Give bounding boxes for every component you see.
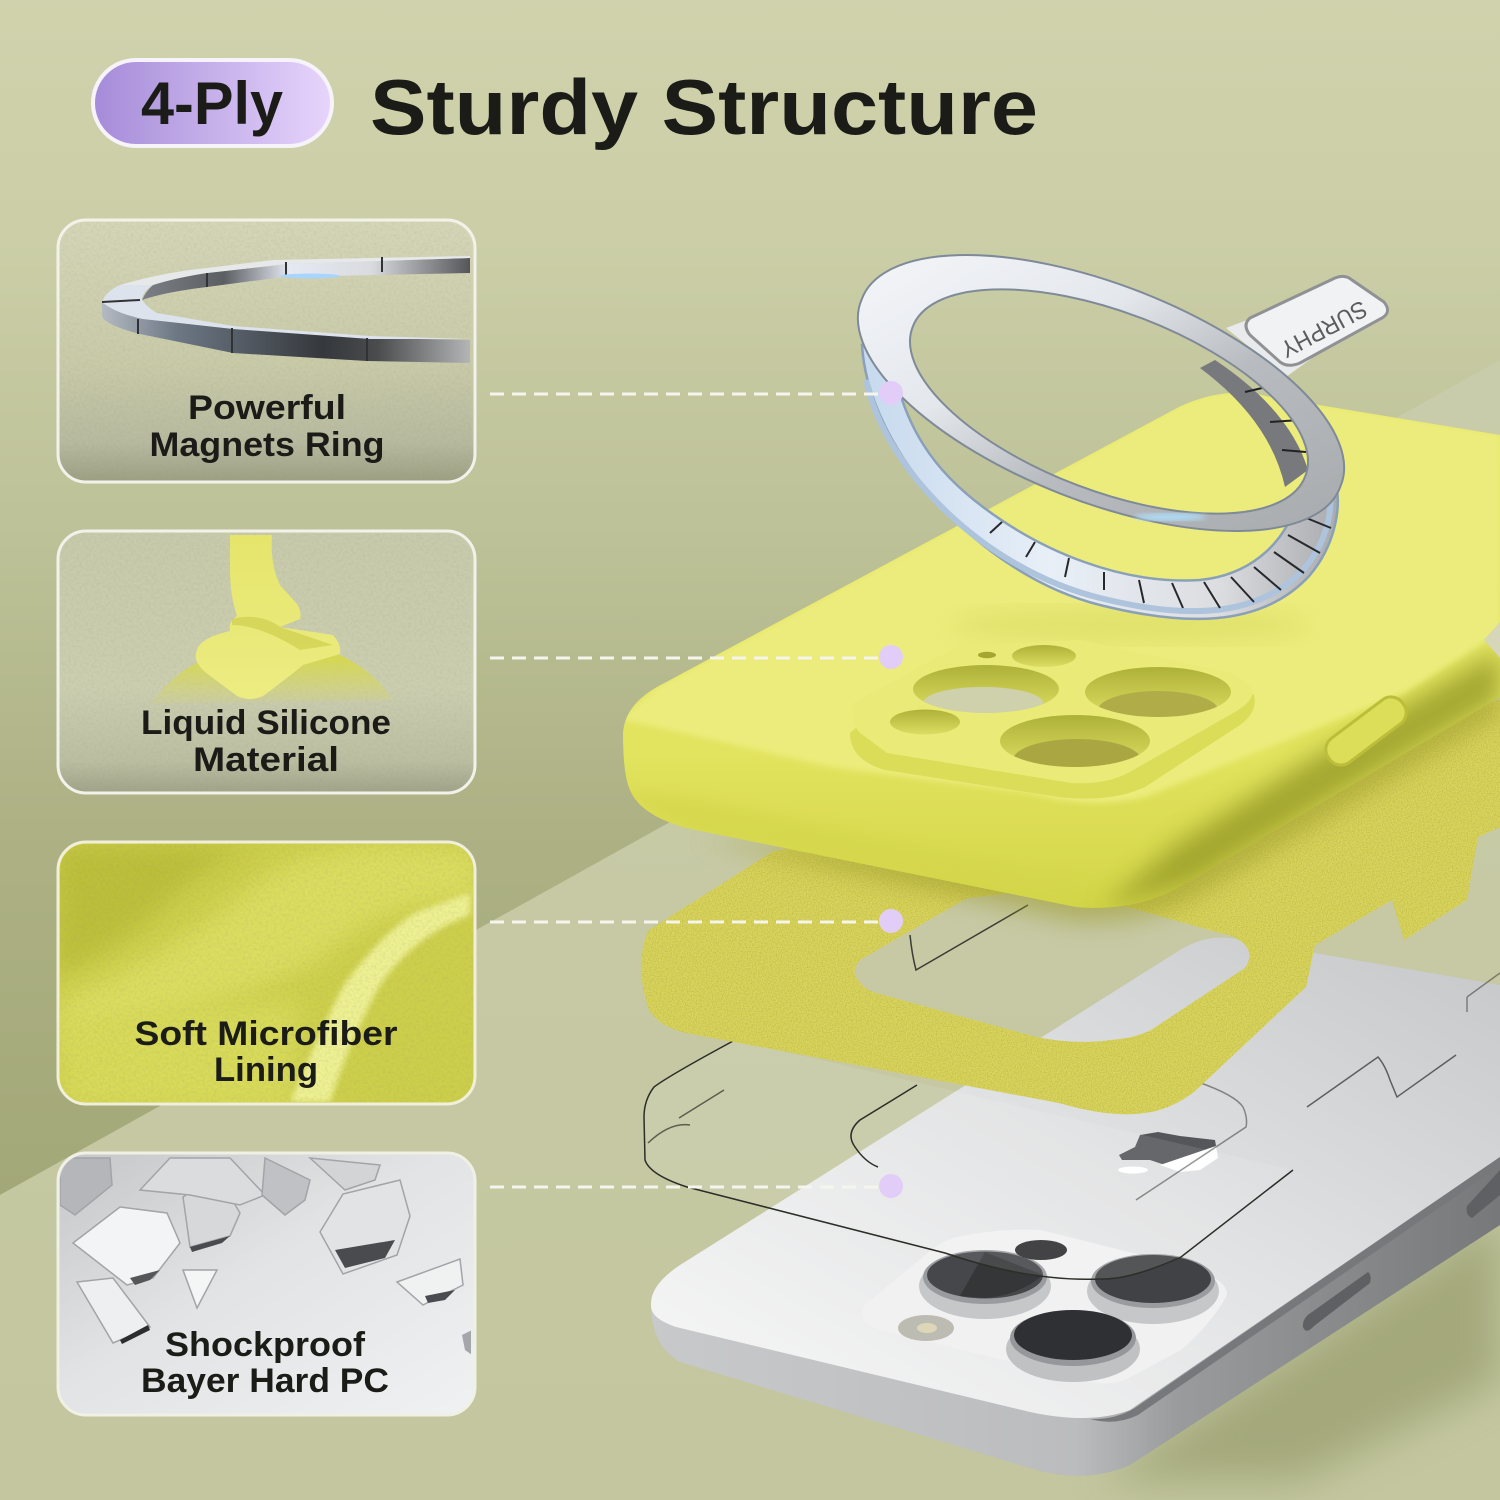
side button — [1320, 691, 1412, 771]
title badge: 4-Ply: 4-Ply — [141, 70, 284, 137]
title badge: 4-Ply — [93, 60, 332, 146]
camera island — [850, 640, 1255, 799]
text: liquid silicone material: Material — [193, 741, 339, 779]
tab stem — [1226, 300, 1330, 377]
connector: magnets ring — [490, 381, 903, 405]
lens: bottom — [1006, 1310, 1140, 1382]
text: soft microfiber lining: Soft Microfiber — [134, 1015, 398, 1053]
lens: top-left — [919, 1250, 1051, 1319]
phone shadow — [1100, 1215, 1500, 1480]
panel: liquid silicone material — [58, 531, 475, 793]
lens: right — [1087, 1254, 1219, 1324]
phone back surface — [651, 938, 1500, 1418]
case shadow on lining — [700, 680, 1500, 922]
SURPHY tab — [1246, 276, 1388, 365]
connector: microfiber — [490, 909, 903, 933]
case back surface — [620, 393, 1500, 803]
text: shockproof bayer hard pc — [141, 1326, 389, 1400]
segment ticks — [990, 515, 1331, 608]
yellow silicone case — [620, 393, 1500, 922]
panel: powerful magnets ring — [58, 220, 475, 482]
inner wall segments — [1200, 360, 1308, 487]
text: powerful magnets ring: Powerful — [188, 389, 346, 427]
microfiber lining layer — [641, 700, 1500, 1114]
panel texture — [60, 533, 471, 791]
mic — [1015, 1240, 1067, 1260]
apple logo — [1118, 1132, 1218, 1174]
side cutout — [1484, 622, 1500, 658]
text: liquid silicone material: Liquid Silicone — [141, 704, 391, 742]
lower ring rim — [866, 380, 1330, 611]
metal magnet ring — [858, 255, 1388, 619]
text: liquid silicone material — [141, 704, 391, 779]
texture: microfiber folds — [55, 844, 480, 1110]
phone body side — [651, 1150, 1500, 1476]
connector: liquid silicone — [490, 645, 903, 669]
case silhouette and side wall — [623, 393, 1500, 908]
icon: magnet ring — [102, 256, 470, 363]
SURPHY tab: SURPHY — [1276, 295, 1371, 363]
case ring shadow — [950, 607, 1310, 643]
text: powerful magnets ring: Magnets Ring — [150, 426, 384, 464]
camera plateau — [862, 1230, 1227, 1384]
text: shockproof bayer hard pc: Bayer Hard PC — [141, 1362, 389, 1400]
icon: silicone drip — [150, 535, 393, 704]
text: shockproof bayer hard pc: Shockproof — [165, 1326, 366, 1364]
ring lens flare — [1134, 514, 1206, 520]
flat ring face — [858, 255, 1344, 531]
text: powerful magnets ring — [150, 389, 384, 464]
connector: hard PC — [490, 1174, 903, 1198]
case side shading — [620, 650, 1500, 910]
lower ring band — [862, 345, 1338, 619]
icon: crystals — [60, 1158, 472, 1355]
panel: soft microfiber lining — [55, 842, 480, 1110]
phone — [651, 938, 1500, 1480]
flash — [898, 1315, 954, 1341]
camera holes — [890, 645, 1231, 767]
title: Sturdy Structure — [370, 63, 1038, 151]
phone chamfer edge — [1090, 1157, 1500, 1422]
panel texture — [86, 222, 458, 244]
panel: shockproof bayer hard pc — [58, 1153, 475, 1415]
text: soft microfiber lining — [134, 1015, 398, 1089]
transparent hard PC shell — [644, 905, 1500, 1279]
text: soft microfiber lining: Lining — [214, 1051, 318, 1089]
side buttons — [1303, 1170, 1500, 1331]
